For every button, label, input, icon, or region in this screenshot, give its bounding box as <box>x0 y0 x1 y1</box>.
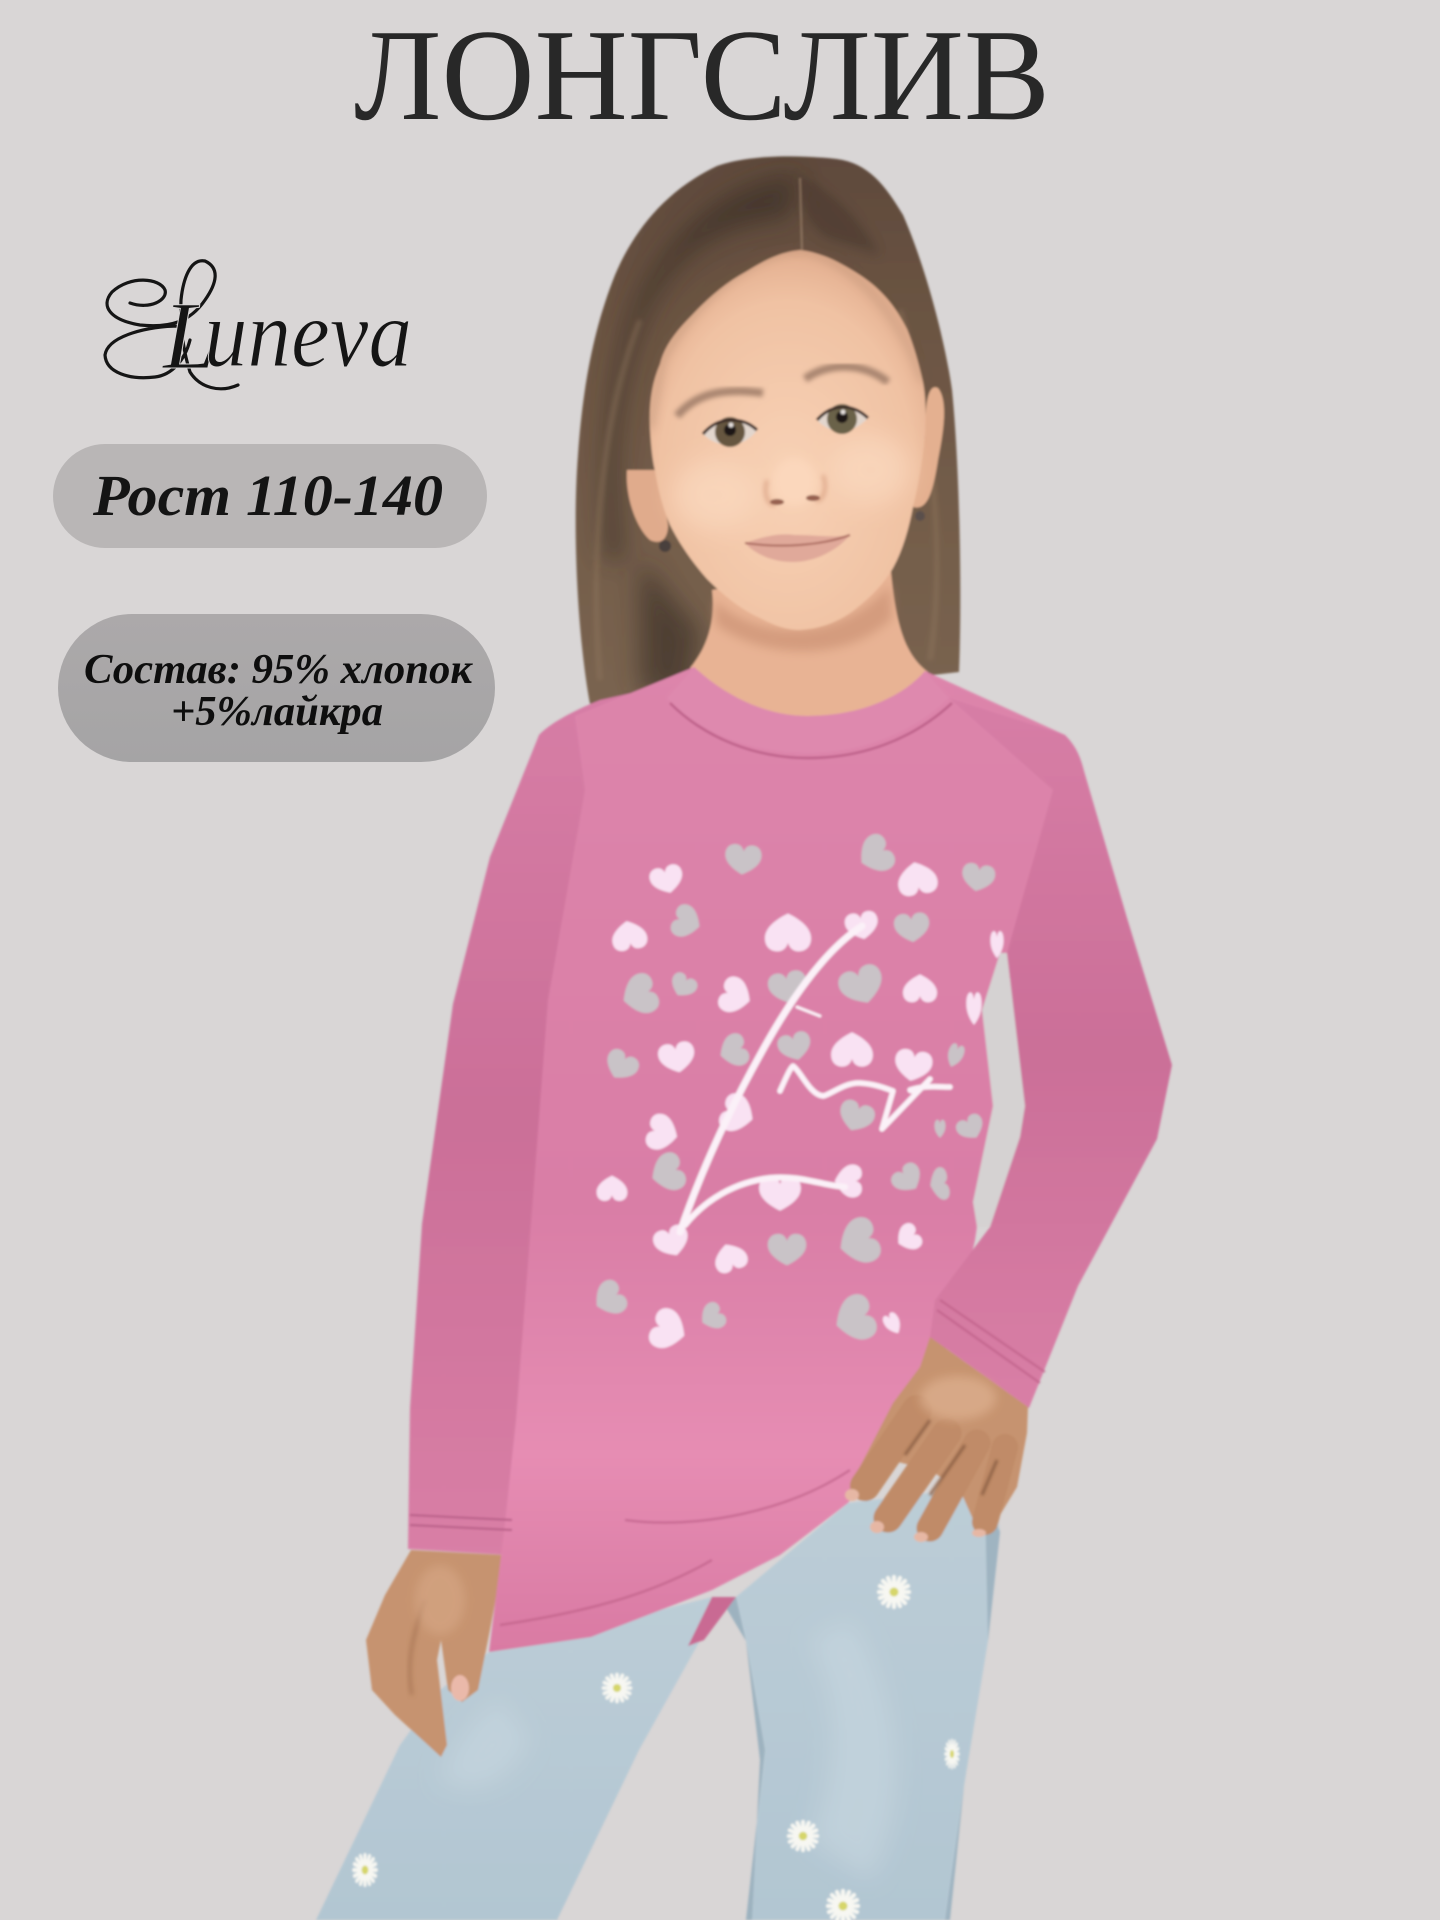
pill: composition: +5%лайкра <box>171 689 383 735</box>
background gap under arm <box>973 953 1025 1227</box>
shirt body <box>489 667 1070 1652</box>
jeans <box>316 1485 1000 1920</box>
shirt print: white swoosh <box>680 926 950 1232</box>
right hand <box>845 1337 1028 1542</box>
shirt folds and hem stitching <box>500 1300 1045 1625</box>
hair shading <box>603 175 800 700</box>
daisies on jeans <box>354 1577 959 1920</box>
face shape <box>650 250 926 630</box>
nose <box>766 458 825 506</box>
ears <box>627 470 668 542</box>
left hand <box>366 1550 504 1757</box>
collar <box>667 667 952 758</box>
logo: Luneva <box>105 261 412 389</box>
shirt print: white hearts <box>597 859 1004 1355</box>
hair <box>576 156 960 704</box>
neck <box>690 560 928 730</box>
shirt print: silver hearts <box>588 830 997 1347</box>
pill: composition <box>58 614 495 762</box>
cheek highlights <box>673 460 757 530</box>
right eye <box>817 404 868 434</box>
shirt hem tail <box>688 1597 736 1646</box>
eyebrows <box>677 391 763 416</box>
earrings <box>659 540 671 552</box>
logo: Luneva: L <box>161 282 216 389</box>
hairline shading <box>650 250 800 429</box>
left sleeve <box>408 680 690 1555</box>
pill: composition: Состав: 95% хлопок <box>84 647 474 693</box>
face and ears <box>627 178 944 630</box>
title: ЛОНГСЛИВ <box>354 3 1050 148</box>
cuff stitching: left sleeve <box>410 1515 512 1530</box>
left eye <box>703 417 757 447</box>
mouth <box>745 534 850 562</box>
pill: height <box>53 444 487 548</box>
illustration: girl in pink longsleeve <box>316 156 1172 1920</box>
logo: Luneva: uneva <box>204 280 412 387</box>
pill: height: Рост 110-140 <box>92 463 443 528</box>
right sleeve <box>930 698 1172 1408</box>
